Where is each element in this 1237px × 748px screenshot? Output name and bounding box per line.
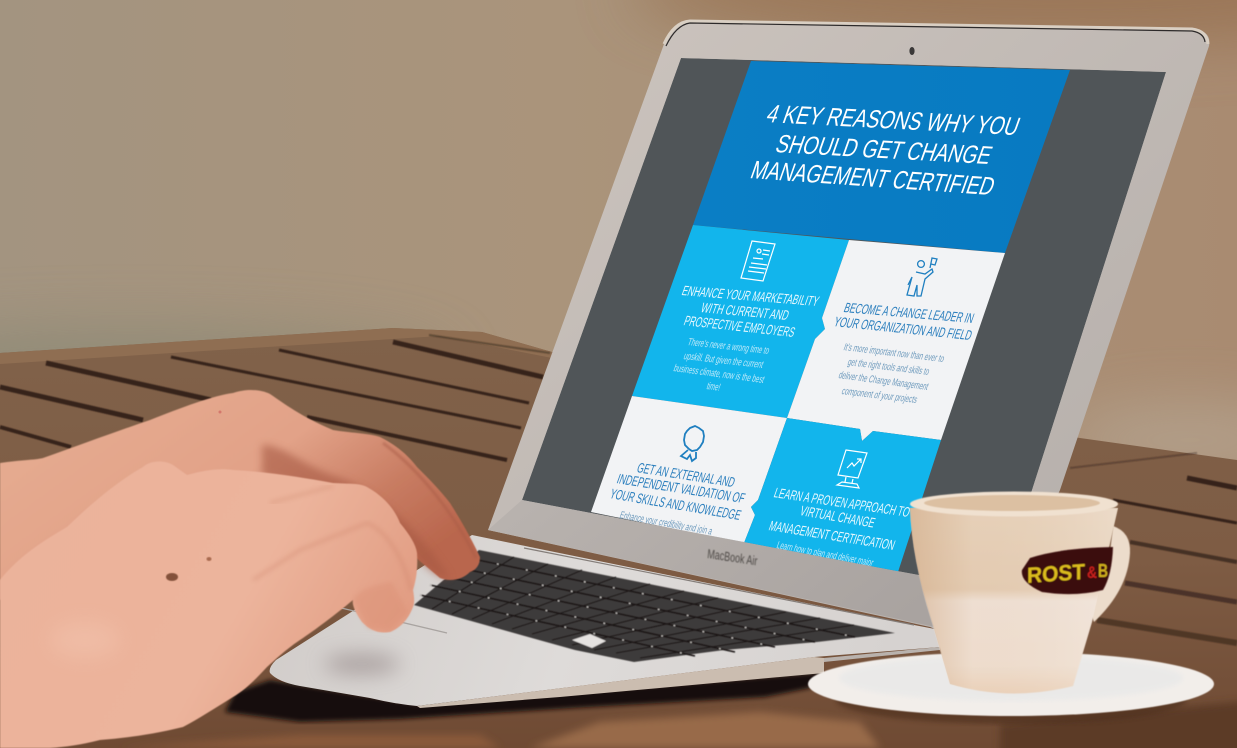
heading: marketability: WITH CURRENT AND bbox=[699, 299, 791, 323]
panel: virtual certification bbox=[744, 418, 941, 572]
back hand bbox=[0, 390, 480, 600]
heading: change leader: BECOME A CHANGE LEADER IN bbox=[842, 299, 976, 326]
body text: change leader: get the right tools and skills to bbox=[846, 357, 931, 378]
heading: certification bbox=[768, 488, 910, 550]
wall background bbox=[0, 0, 1237, 475]
saucer bbox=[808, 652, 1214, 724]
cup interior bbox=[924, 495, 1100, 511]
heading: change leader bbox=[836, 302, 974, 340]
keyboard notch bbox=[572, 634, 606, 648]
cup logo: & bbox=[1087, 563, 1097, 582]
hinge line bbox=[524, 548, 914, 625]
coffee cup bbox=[910, 492, 1130, 694]
body text: marketability: There's never a wrong time to bbox=[686, 337, 771, 357]
wooden table bbox=[0, 328, 1237, 748]
panel: change leader bbox=[787, 240, 1005, 441]
webcam bbox=[909, 47, 915, 55]
lid bottom chin bbox=[488, 500, 1000, 628]
infographic title: MANAGEMENT CERTIFIED bbox=[747, 157, 999, 201]
laptop base bbox=[270, 535, 940, 708]
trackpad edge bbox=[337, 607, 447, 633]
panel: independent validation bbox=[591, 396, 787, 543]
mole bbox=[166, 573, 178, 581]
lit foreground planks bbox=[530, 712, 880, 748]
finger fold shading bbox=[253, 523, 411, 590]
body text: marketability: business climate, now is the best bbox=[672, 363, 766, 386]
icon: award ribbon bbox=[681, 426, 704, 461]
body text: change leader: It's more important now than ever to bbox=[842, 342, 946, 365]
cup logo: B bbox=[1098, 561, 1108, 581]
body text: marketability: upskill. But given the current bbox=[682, 351, 765, 371]
heading: validation: INDEPENDENT VALIDATION OF bbox=[615, 470, 747, 506]
body text: marketability: time! bbox=[705, 381, 722, 394]
heading: marketability: PROSPECTIVE EMPLOYERS bbox=[682, 312, 797, 340]
body text: validation: Enhance your credibility and join a bbox=[618, 510, 714, 537]
icon: resume document bbox=[741, 241, 775, 281]
cup body bbox=[910, 508, 1118, 694]
highlight on wrist bbox=[50, 622, 120, 658]
cup logo: ROST bbox=[1027, 559, 1086, 588]
heading: validation: GET AN EXTERNAL AND bbox=[635, 459, 737, 490]
icon: person with flag bbox=[907, 258, 937, 296]
keyboard bbox=[414, 550, 895, 662]
heading: marketability bbox=[682, 286, 820, 337]
heading: certification: VIRTUAL CHANGE bbox=[798, 502, 877, 530]
heading: validation bbox=[611, 463, 746, 520]
MacBook Air label: MacBook Air bbox=[707, 547, 758, 568]
screen side margins bbox=[522, 58, 1166, 590]
hand shadow on deck bbox=[324, 654, 400, 674]
body text: marketability bbox=[672, 337, 771, 394]
laptop screen bbox=[522, 58, 1166, 590]
body text: change leader: deliver the Change Management bbox=[837, 370, 930, 393]
cup logo bbox=[1022, 547, 1113, 594]
infographic title: SHOULD GET CHANGE bbox=[772, 131, 996, 170]
body text: certification: Learn how to plan and deliver major bbox=[775, 540, 875, 569]
cup rim bbox=[910, 492, 1118, 516]
cup handle bbox=[1085, 526, 1130, 622]
heading: certification: LEARN A PROVEN APPROACH TO bbox=[772, 484, 913, 520]
infographic header panel bbox=[693, 61, 1070, 253]
heading: change leader: YOUR ORGANIZATION AND FIELD bbox=[832, 313, 974, 343]
shadow under laptop bbox=[225, 672, 824, 722]
heading: certification: MANAGEMENT CERTIFICATION bbox=[767, 517, 897, 553]
body text: change leader bbox=[837, 342, 946, 406]
panel: marketability bbox=[632, 225, 849, 418]
infographic title: 4 KEY REASONS WHY YOU bbox=[763, 101, 1024, 141]
body text: change leader: component of your projects bbox=[840, 386, 919, 406]
front hand bbox=[0, 461, 417, 748]
heading: marketability: ENHANCE YOUR MARKETABILITY bbox=[680, 282, 821, 309]
heading: validation: YOUR SKILLS AND KNOWLEDGE bbox=[608, 485, 743, 523]
base front lip bbox=[417, 657, 824, 708]
infographic title bbox=[750, 105, 1020, 194]
icon: monitor with chart bbox=[837, 450, 867, 488]
laptop lid bbox=[488, 20, 1209, 650]
key glints bbox=[420, 558, 855, 656]
